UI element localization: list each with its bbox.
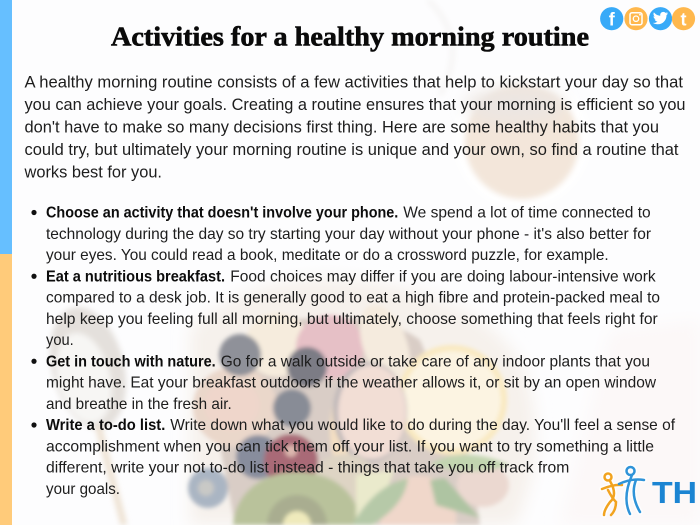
title: Activities for a healthy morning routine: [111, 22, 589, 52]
blue figure: [619, 467, 644, 514]
bullet: to-do list: Write down what you would like to do during the day. You'll feel a sense of: [170, 417, 676, 434]
intro paragraph: could try, but ultimately your morning routine is unique and your own, so find a routine that: [24, 141, 679, 159]
intro paragraph: A healthy morning routine consists of a few activities that help to kickstart your day so that: [24, 74, 684, 92]
bullet: nature: might have. Eat your breakfast outdoors if the weather allows it, or sit by an open window: [46, 374, 657, 392]
left colour bar: [0, 0, 12, 525]
bullet: nutritious breakfast: Food choices may differ if you are doing labour-intensive work: [230, 268, 656, 285]
bullet: nutritious breakfast: [31, 268, 660, 349]
icon: instagram: [624, 7, 648, 30]
icon: twitter: [649, 7, 672, 30]
bullet: nature: [31, 353, 657, 413]
bullet: choose an activity: technology during the day so try starting your day without your phone - it's also better for: [46, 226, 651, 243]
bullet: nature: Go for a walk outside or take care of any indoor plants that you: [221, 353, 650, 370]
logo letters: TH: [652, 475, 697, 510]
bullet: nature: Get in touch with nature.: [46, 353, 216, 370]
social icons: [600, 7, 695, 30]
bullet: to-do list: your goals.: [46, 481, 120, 498]
intro paragraph: don't have to make so many decisions first thing. Here are some healthy habits that you: [24, 118, 659, 136]
bullet: to-do list: [31, 417, 676, 498]
intro paragraph: you can achieve your goals. Creating a routine ensures that your morning is efficient so you: [24, 96, 685, 114]
intro paragraph: [23, 74, 685, 182]
bullet: choose an activity: your eyes. You could read a book, meditate or do a crossword puzzle, for example.: [46, 247, 609, 264]
logo halo: [602, 467, 644, 515]
bullet: nutritious breakfast: you.: [46, 332, 74, 349]
bullet: choose an activity: We spend a lot of time connected to: [403, 204, 651, 222]
bullet: to-do list: Write a to-do list.: [46, 417, 165, 434]
bullet: nutritious breakfast: help keep you feeling full all morning, but ultimately, choose something that feels right for: [46, 311, 658, 328]
bullet: nutritious breakfast: Eat a nutritious breakfast.: [46, 268, 225, 285]
intro paragraph: works best for you.: [23, 164, 162, 182]
logo: [602, 467, 697, 515]
orange figure: [602, 474, 622, 515]
bullet: choose an activity: Choose an activity that doesn't involve your phone.: [46, 204, 398, 222]
bullet: to-do list: different, write your not to-do list instead - things that take you off track from: [46, 460, 569, 476]
bullet: nutritious breakfast: compared to a desk job. It is generally good to eat a high fibre and protein-packed meal to: [46, 290, 660, 306]
bullet: nature: and breathe in the fresh air.: [46, 396, 232, 413]
icon: tumblr: t: [680, 10, 686, 30]
bullet: to-do list: accomplishment when you can tick them off your list. If you want to try something a little: [46, 438, 654, 455]
icon: facebook: f: [609, 10, 616, 30]
bullet: choose an activity: [31, 204, 651, 264]
